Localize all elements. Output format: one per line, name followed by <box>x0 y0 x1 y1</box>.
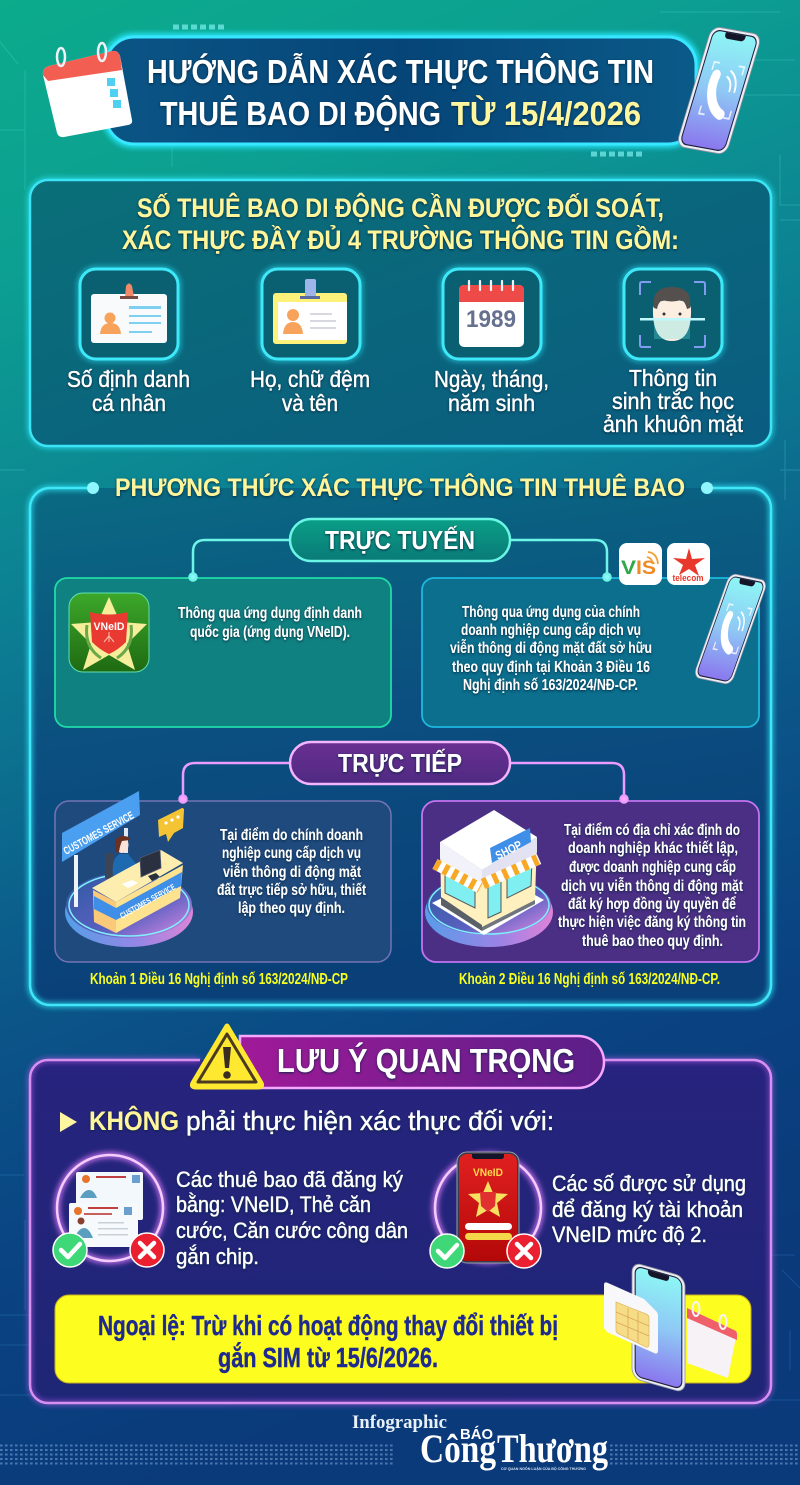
heading: in-person pill <box>290 742 510 784</box>
card: operator store <box>55 791 391 962</box>
title text line 1: HƯỚNG DẪN XÁC THỰC THÔNG TIN <box>147 52 654 90</box>
heading pill: LƯU Ý QUAN TRỌNG <box>277 1042 575 1079</box>
heading: online pill: TRỰC TUYẾN <box>325 525 475 555</box>
icon: phone with SIM <box>604 1262 685 1393</box>
icon: calendar 1989: 1989 <box>466 306 516 333</box>
store description <box>217 826 367 917</box>
panel: fields to verify <box>30 180 771 446</box>
title banner <box>106 37 696 144</box>
panel: verification methods <box>30 472 771 1005</box>
icon: ID cards with check and cross <box>53 1155 164 1267</box>
text: registered subscribers: gắn chip. <box>176 1244 259 1269</box>
icon box frames <box>80 269 722 359</box>
label: full name: Họ, chữ đệm <box>250 366 370 392</box>
title text line 2: THUÊ BAO DI ĐỘNG <box>160 94 441 132</box>
illustration: customer service desk: CUSTOMES SERVICE <box>118 882 177 921</box>
shop description <box>558 821 746 950</box>
connector: in person <box>180 763 628 802</box>
carrier app description: Thông qua ứng dụng của chính <box>462 604 640 621</box>
text: registered subscribers: cước, Căn cước công dân <box>176 1218 408 1243</box>
text: VNeID level 2 numbers: VNeID mức độ 2. <box>552 1222 707 1247</box>
label: full name: và tên <box>282 390 338 416</box>
text: registered subscribers: bằng: VNeID, Thẻ căn <box>176 1192 371 1217</box>
sub-heading: phải thực hiện xác thực đối với: <box>186 1106 554 1136</box>
callout: exception <box>55 1295 751 1383</box>
text: VNeID level 2 numbers: để đăng ký tài khoản <box>552 1197 743 1222</box>
label: full name <box>250 366 370 416</box>
carrier app description: doanh nghiệp cung cấp dịch vụ <box>461 622 641 639</box>
VNeID description: Thông qua ứng dụng định danh <box>178 605 362 622</box>
illustration: shop: SHOP <box>493 838 524 863</box>
shop description: đất ký hợp đồng ủy quyền để <box>568 895 736 913</box>
label: date of birth: năm sinh <box>448 390 535 416</box>
label: personal ID: cá nhân <box>92 390 166 416</box>
legal reference right: Khoản 2 Điều 16 Nghị định số 163/2024/NĐ-CP. <box>459 971 720 988</box>
footer dot pattern <box>0 1443 800 1467</box>
store description: đất trực tiếp sở hữu, thiết <box>217 882 367 899</box>
icon: VNeID phone with check and cross <box>430 1152 541 1268</box>
illustration: customer service desk <box>62 791 193 947</box>
text: VNeID level 2 numbers: Các số được sử dụng <box>552 1171 746 1196</box>
panel heading line 1: SỐ THUÊ BAO DI ĐỘNG CẦN ĐƯỢC ĐỐI SOÁT, <box>137 191 664 223</box>
shop description: thực hiện việc đăng ký thông tin <box>558 914 746 931</box>
legal reference left: Khoản 1 Điều 16 Nghị định số 163/2024/NĐ-CP <box>90 971 348 988</box>
icon: name badge <box>273 279 347 344</box>
icon: Telecom logo: telecom <box>672 573 704 583</box>
label: biometrics: sinh trắc học <box>612 388 734 414</box>
carrier app description: Nghị định số 163/2024/NĐ-CP. <box>463 677 638 694</box>
panel heading line 2: XÁC THỰC ĐẦY ĐỦ 4 TRƯỜNG THÔNG TIN GỒM: <box>122 223 679 255</box>
shop description: được doanh nghiệp cung cấp <box>569 859 736 876</box>
connector: online <box>190 540 610 580</box>
bullet arrow <box>60 1112 77 1132</box>
label: date of birth: Ngày, tháng, <box>434 366 549 392</box>
label: personal ID: Số định danh <box>67 366 190 392</box>
carrier app description: viễn thông di động mặt đất sở hữu <box>450 638 652 657</box>
icon: phone with call <box>676 26 762 155</box>
store description: Tại điểm do chính doanh <box>220 826 363 844</box>
shop description: thuê bao theo quy định. <box>582 933 723 950</box>
VNeID description <box>178 605 362 641</box>
footer logo: Thương <box>497 1426 608 1471</box>
icon: VS logo: V <box>621 558 636 579</box>
sub-heading: KHÔNG <box>89 1105 179 1136</box>
icon: phone <box>693 573 768 685</box>
store description: lập theo quy định. <box>238 900 345 917</box>
icon: small calendar <box>687 1302 737 1378</box>
icon: VNeID <box>69 593 149 672</box>
icon: VS logo: IS <box>636 558 656 579</box>
heading: online pill <box>290 519 510 561</box>
label: biometrics <box>603 365 744 437</box>
icon: VNeID: VNeID <box>94 621 125 633</box>
icon: warning triangle <box>192 1026 262 1087</box>
card: carrier app <box>422 578 759 727</box>
footer logo: Công <box>420 1426 496 1471</box>
footer logo: BÁO <box>460 1426 493 1443</box>
heading: in-person pill: TRỰC TIẾP <box>338 748 462 778</box>
panel heading: PHƯƠNG THỨC XÁC THỰC THÔNG TIN THUÊ BAO <box>115 472 685 502</box>
footer logo: Infographic <box>352 1412 447 1433</box>
label: date of birth <box>434 366 549 416</box>
panel: important notes <box>30 1026 771 1403</box>
carrier app description: theo quy định tại Khoản 3 Điều 16 <box>452 659 650 676</box>
illustration: customer service desk: CUSTOMES SERVICE <box>62 810 136 858</box>
icon: Telecom logo <box>667 543 710 585</box>
text: registered subscribers <box>176 1167 408 1269</box>
exception text line 1: Ngoại lệ: Trừ khi có hoạt động thay đổi thiết bị <box>98 1310 558 1341</box>
store description: nghiệp cung cấp dịch vụ <box>222 845 361 862</box>
icon: VNeID phone with check and cross: VNeID <box>473 1167 503 1179</box>
footer logo <box>352 1412 608 1471</box>
icon: face scan <box>640 282 705 347</box>
store description: viễn thông di động mặt <box>223 862 362 881</box>
shop description: doanh nghiệp khác thiết lập, <box>568 840 738 857</box>
icon: VS logo <box>619 543 662 585</box>
label: biometrics: Thông tin <box>629 365 717 391</box>
shop description: Tại điểm có địa chỉ xác định do <box>564 821 740 839</box>
illustration: shop <box>425 810 553 947</box>
shop description: dịch vụ viễn thông di động mặt <box>561 876 744 895</box>
card: authorised shop <box>422 801 759 962</box>
icon: calendar <box>43 43 132 137</box>
text: VNeID level 2 numbers <box>552 1171 746 1247</box>
card: VNeID app <box>55 578 391 727</box>
text: registered subscribers: Các thuê bao đã đăng ký <box>176 1167 403 1192</box>
icon: ID card <box>91 284 167 343</box>
carrier app description <box>450 604 652 694</box>
footer logo: CƠ QUAN NGÔN LUẬN CỦA BỘ CÔNG THƯƠNG <box>501 1466 586 1471</box>
label: personal ID <box>67 366 190 416</box>
icon: calendar 1989 <box>459 281 524 347</box>
title date: TỪ 15/4/2026 <box>451 95 641 132</box>
decorative dash bars <box>173 27 643 154</box>
label: biometrics: ảnh khuôn mặt <box>603 411 744 437</box>
exception text line 2: gắn SIM từ 15/6/2026. <box>218 1342 438 1373</box>
heading pill <box>240 1036 604 1088</box>
VNeID description: quốc gia (ứng dụng VNeID). <box>190 624 350 641</box>
